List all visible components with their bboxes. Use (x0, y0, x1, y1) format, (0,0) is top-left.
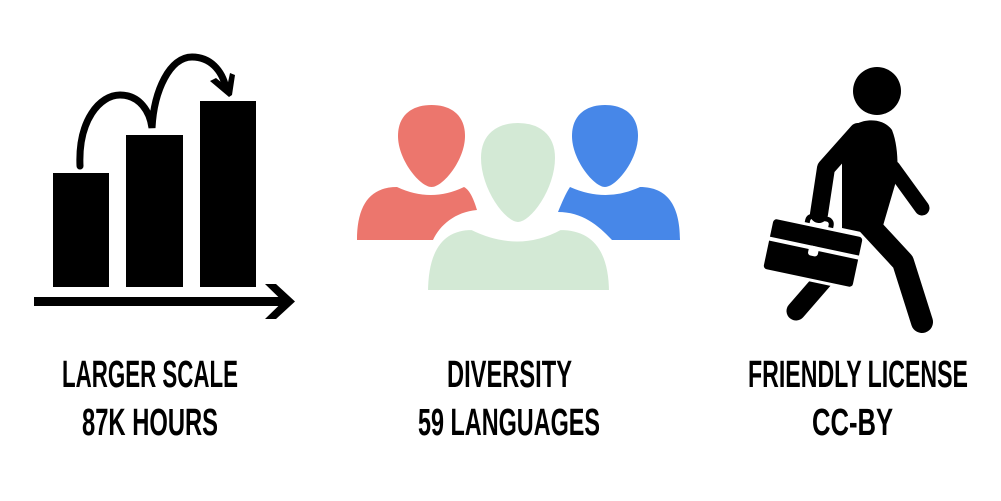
text: diversity: DIVERSITY (447, 354, 572, 396)
icon: walking person with briefcase (761, 67, 922, 322)
text: diversity: 59 LANGUAGES (418, 402, 600, 444)
text: diversity (418, 354, 600, 444)
icon: growth bar chart (34, 57, 295, 319)
icon: diverse people group (357, 105, 680, 293)
text: larger scale (62, 354, 238, 444)
text: larger scale: LARGER SCALE (62, 354, 238, 396)
text: friendly license: CC-BY (812, 402, 893, 444)
text: friendly license (748, 354, 968, 444)
text: larger scale: 87K HOURS (82, 402, 218, 444)
